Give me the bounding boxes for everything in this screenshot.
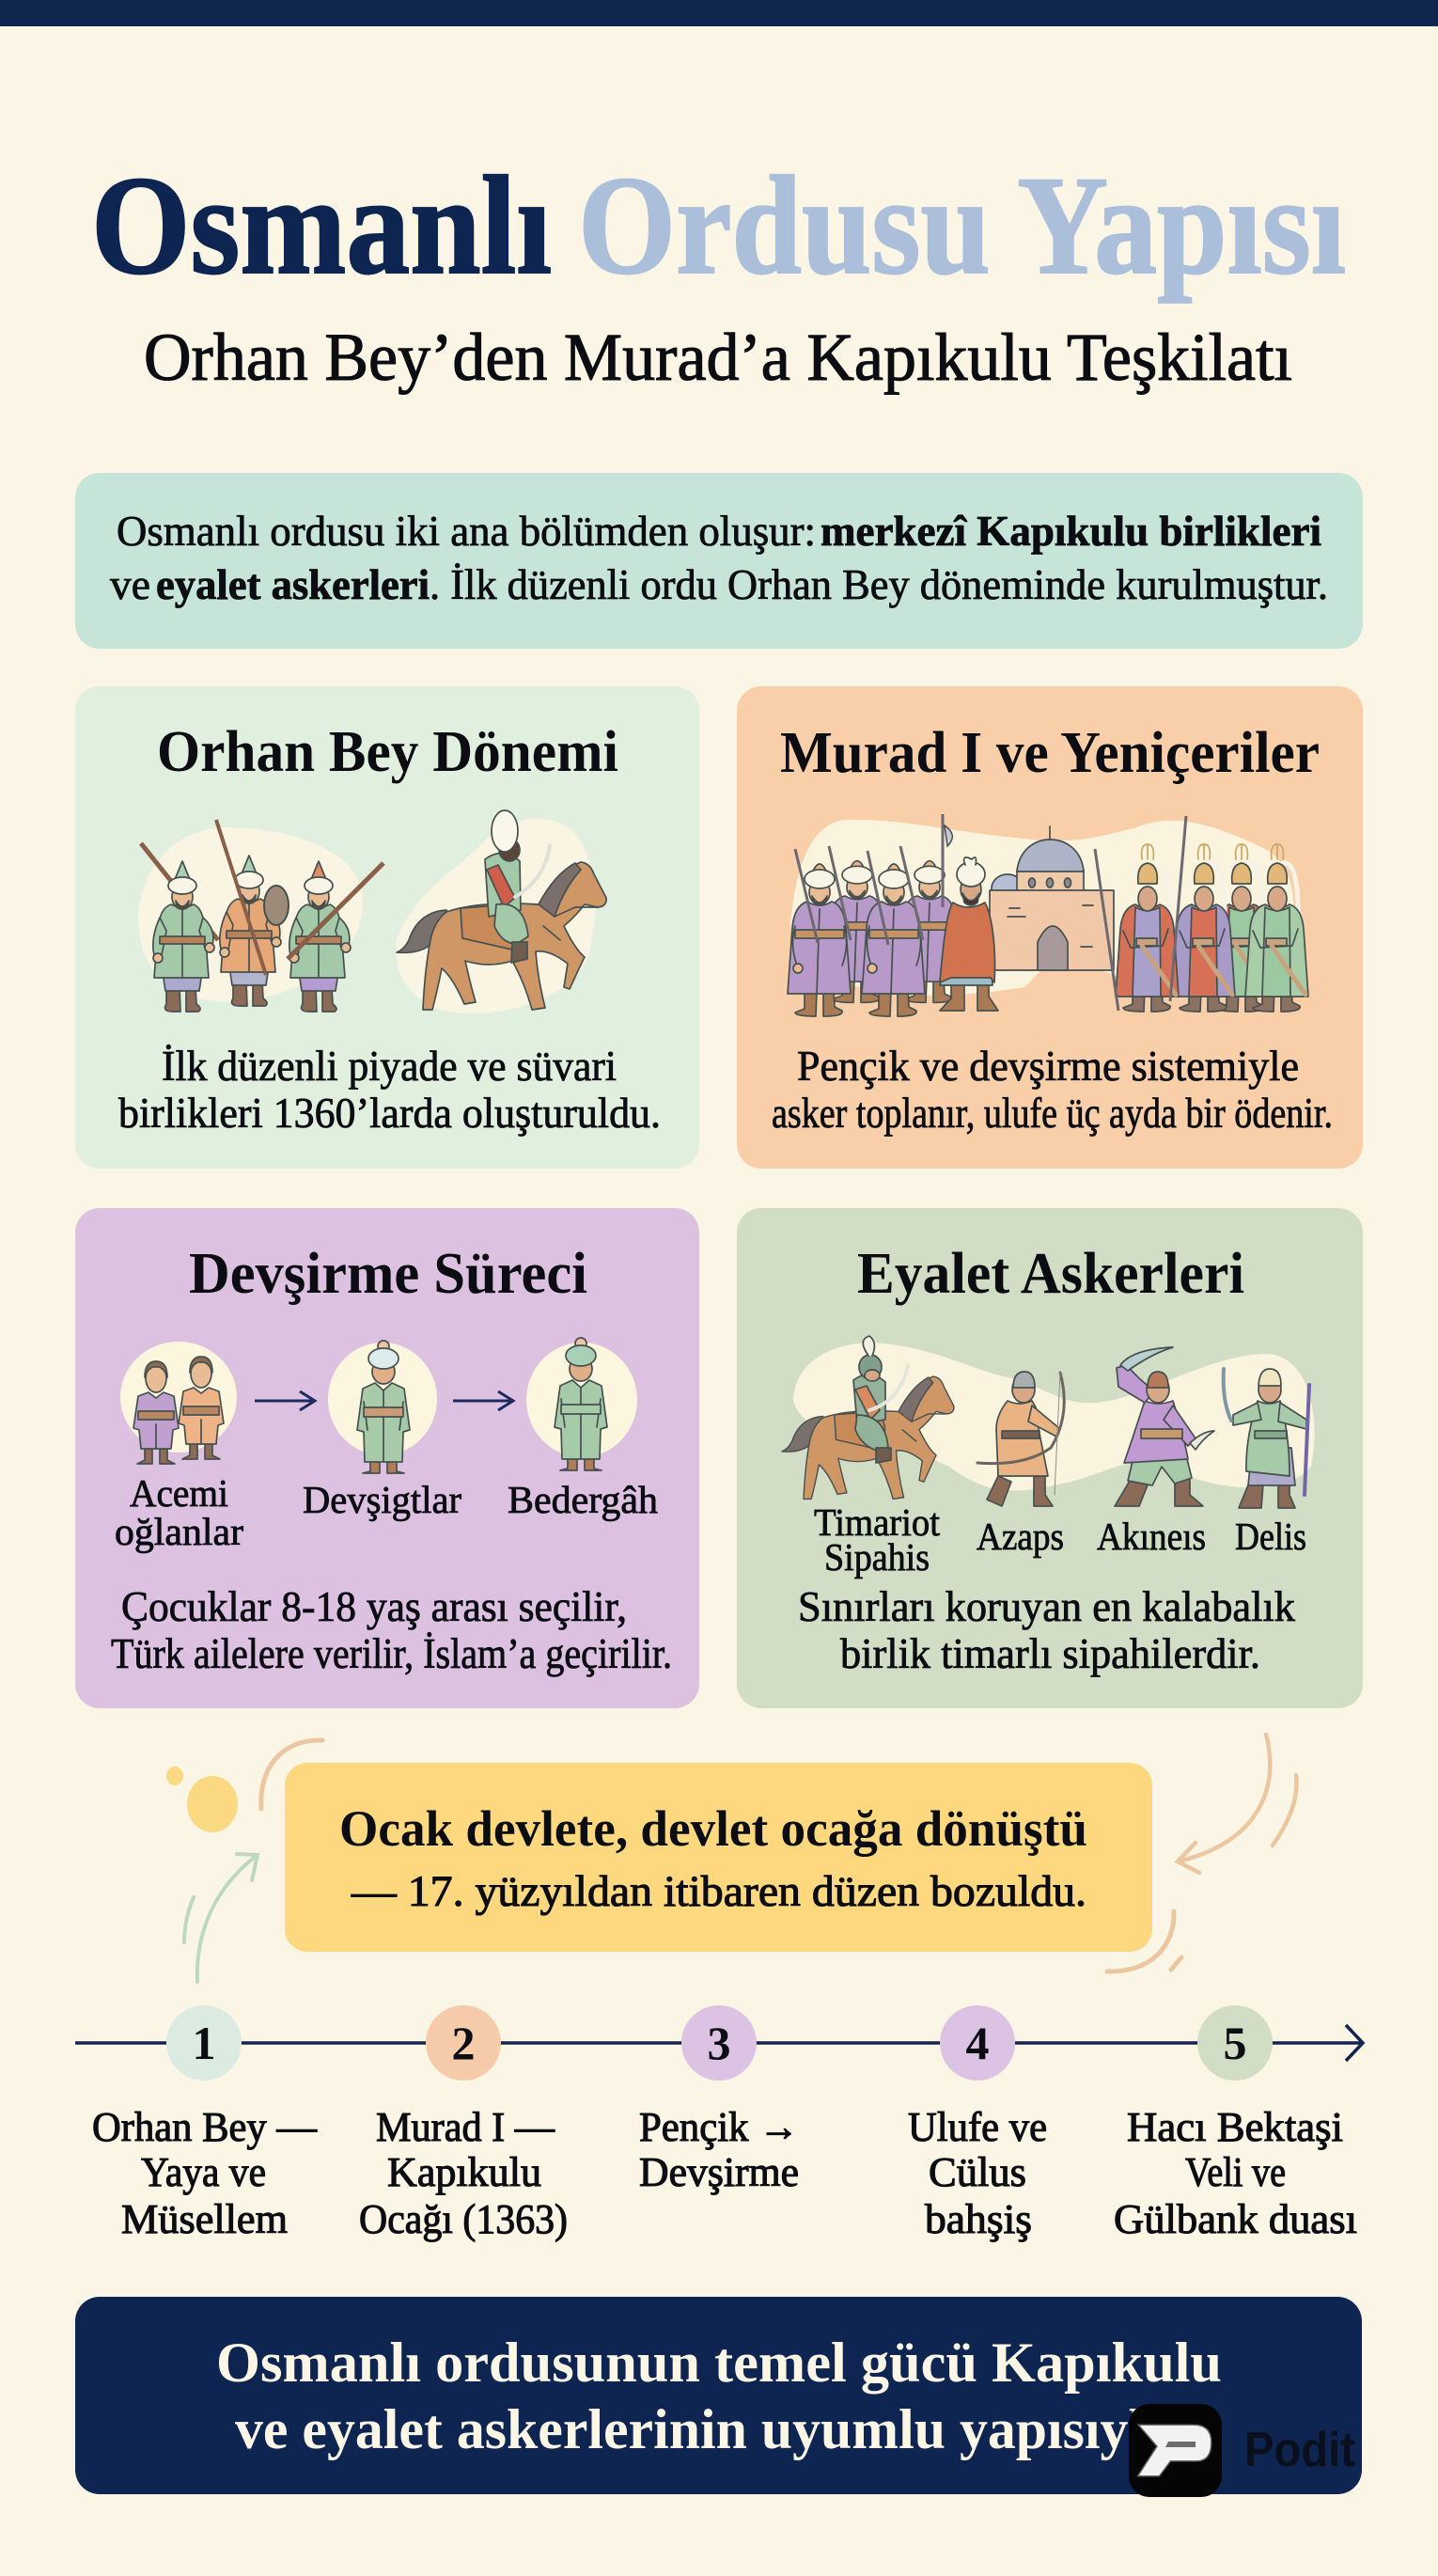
step: Devşigtlar <box>303 1341 461 1521</box>
title: Osmanlı <box>91 148 552 304</box>
commander <box>940 857 998 1011</box>
title <box>91 148 1346 304</box>
panel: introduction: Osmanlı ordusu iki ana bölümden oluşur: <box>117 508 816 555</box>
top bar <box>0 0 1438 26</box>
step 3: Devşirme <box>639 2149 799 2195</box>
text: Devşirme body <box>111 1583 672 1677</box>
spear and halberd right <box>1095 816 1186 1011</box>
text: Devşirme body: Çocuklar 8-18 yaş arası seçilir, <box>121 1583 627 1630</box>
arrow: green curved <box>184 1854 258 1982</box>
callout: — 17. yüzyıldan itibaren düzen bozuldu. <box>351 1867 1086 1916</box>
step 4: Ulufe ve <box>908 2104 1047 2150</box>
step 1 <box>92 2005 318 2242</box>
horse and rider <box>397 810 606 1010</box>
subtitle: Orhan Bey’den Murad’a Kapıkulu Teşkilatı <box>144 320 1292 395</box>
labels: soldier types: Sipahis <box>824 1535 930 1579</box>
labels: soldier types: Timariot <box>814 1500 941 1544</box>
panel: introduction: merkezî Kapıkulu birlikleri <box>821 508 1321 555</box>
step 5 <box>1114 2005 1357 2242</box>
step 4 <box>908 2005 1047 2242</box>
step 1: Orhan Bey — <box>92 2104 318 2150</box>
text: Orhan Bey body: birlikleri 1360’larda oluşturuldu. <box>118 1090 661 1137</box>
soldier with musket <box>288 861 383 1012</box>
step 4: Cülus <box>929 2149 1026 2195</box>
text: Eyalet body: Sınırları koruyan en kalabalık <box>798 1583 1295 1630</box>
purple infantry front <box>788 864 851 1016</box>
step 5: Hacı Bektaşi <box>1127 2104 1343 2150</box>
labels: soldier types <box>814 1500 1306 1579</box>
panel: Devşirme Süreci <box>75 1208 699 1708</box>
text: Eyalet body: birlik timarlı sipahilerdir. <box>840 1630 1260 1677</box>
spear <box>141 843 218 940</box>
callout: Ocak devlete, devlet ocağa dönüştü <box>339 1800 1087 1857</box>
panel: Murad I ve Yeniçeriler <box>737 686 1363 1169</box>
panel: introduction <box>75 473 1363 649</box>
purple infantry rear <box>825 861 888 1002</box>
panel: introduction: ve <box>110 561 150 608</box>
halberd left <box>943 814 952 907</box>
step: Acemi oğlanlar: oğlanlar <box>115 1510 243 1553</box>
illustration: infantry and cavalry <box>138 810 606 1013</box>
text: Devşirme body: Türk ailelere verilir, İslam’a geçirilir. <box>111 1630 672 1677</box>
step 4: bahşiş <box>925 2196 1032 2242</box>
decorative dots <box>166 1767 238 1832</box>
azap archer <box>977 1372 1064 1506</box>
text: Murad body <box>772 1043 1333 1137</box>
step 3: Pençik → <box>639 2104 799 2150</box>
panel: Orhan Bey Dönemi <box>75 686 699 1169</box>
step: Acemi oğlanlar <box>115 1342 243 1553</box>
step 1: Müsellem <box>121 2196 288 2242</box>
panel: Eyalet Askerleri <box>737 1208 1363 1708</box>
decorative curves <box>261 1740 1181 1971</box>
step 2: Ocağı (1363) <box>359 2196 568 2242</box>
labels: soldier types: Delis <box>1235 1515 1306 1558</box>
arrow <box>453 1391 513 1410</box>
footer banner: ve eyalet askerlerinin uyumlu yapısıyla <box>235 2398 1172 2460</box>
timeline <box>75 2005 1363 2242</box>
text: Murad body: Pençik ve devşirme sistemiyle <box>797 1043 1299 1090</box>
deli warrior <box>1224 1369 1309 1508</box>
step 3 <box>639 2005 799 2195</box>
soldier with shield <box>216 820 289 1006</box>
step: Devşigtlar: Devşigtlar <box>303 1478 461 1521</box>
title: Ordusu Yapısı <box>578 148 1346 304</box>
arrow <box>255 1391 315 1410</box>
step 2: Kapıkulu <box>387 2149 541 2195</box>
labels: soldier types: Akıneıs <box>1097 1515 1206 1558</box>
panel: introduction: . İlk düzenli ordu Orhan Bey döneminde kurulmuştur. <box>430 561 1328 608</box>
step: Bedergâh: Bedergâh <box>508 1478 658 1521</box>
timariot sipahi on horseback <box>782 1336 954 1499</box>
step 4: 4 <box>966 2017 989 2069</box>
watermark logo: Podit <box>1244 2423 1355 2477</box>
text: Orhan Bey body: İlk düzenli piyade ve süvari <box>162 1043 617 1090</box>
arrow: orange curved <box>1178 1735 1296 1873</box>
text: Eyalet body <box>798 1583 1295 1677</box>
illustration: provincial soldiers <box>782 1336 1315 1508</box>
step 5: Veli ve <box>1185 2149 1286 2195</box>
text: Orhan Bey body <box>118 1043 661 1137</box>
step 5: 5 <box>1224 2017 1246 2069</box>
step 1: Yaya ve <box>141 2149 266 2195</box>
step: Acemi oğlanlar: Acemi <box>130 1471 228 1515</box>
footer banner: Osmanlı ordusunun temel gücü Kapıkulu <box>216 2332 1222 2394</box>
barracks building <box>990 826 1114 970</box>
text: Murad body: asker toplanır, ulufe üç ayda bir ödenir. <box>772 1090 1333 1137</box>
heading: Devşirme Süreci: Devşirme Süreci <box>189 1242 587 1306</box>
step 1: 1 <box>192 2017 216 2069</box>
step 2 <box>359 2005 568 2242</box>
heading: Eyalet Askerleri: Eyalet Askerleri <box>857 1242 1244 1306</box>
step 2: 2 <box>451 2017 476 2069</box>
step 2: Murad I — <box>376 2104 555 2150</box>
janissaries <box>1210 844 1273 1012</box>
spears <box>795 846 923 945</box>
watermark logo <box>1129 2404 1355 2497</box>
step 3: 3 <box>707 2017 731 2069</box>
step 5: Gülbank duası <box>1114 2196 1357 2242</box>
heading: Orhan Bey Dönemi: Orhan Bey Dönemi <box>157 720 618 784</box>
callout <box>285 1763 1152 1952</box>
labels: soldier types: Azaps <box>977 1515 1064 1558</box>
akıncı raider <box>1115 1347 1214 1506</box>
step: Bedergâh <box>508 1338 658 1521</box>
illustration: janissaries and barracks <box>788 814 1308 1016</box>
heading: Murad I ve Yeniçeriler: Murad I ve Yeniçeriler <box>780 721 1320 785</box>
panel: introduction: eyalet askerleri <box>156 561 430 608</box>
footer banner <box>75 2297 1362 2494</box>
